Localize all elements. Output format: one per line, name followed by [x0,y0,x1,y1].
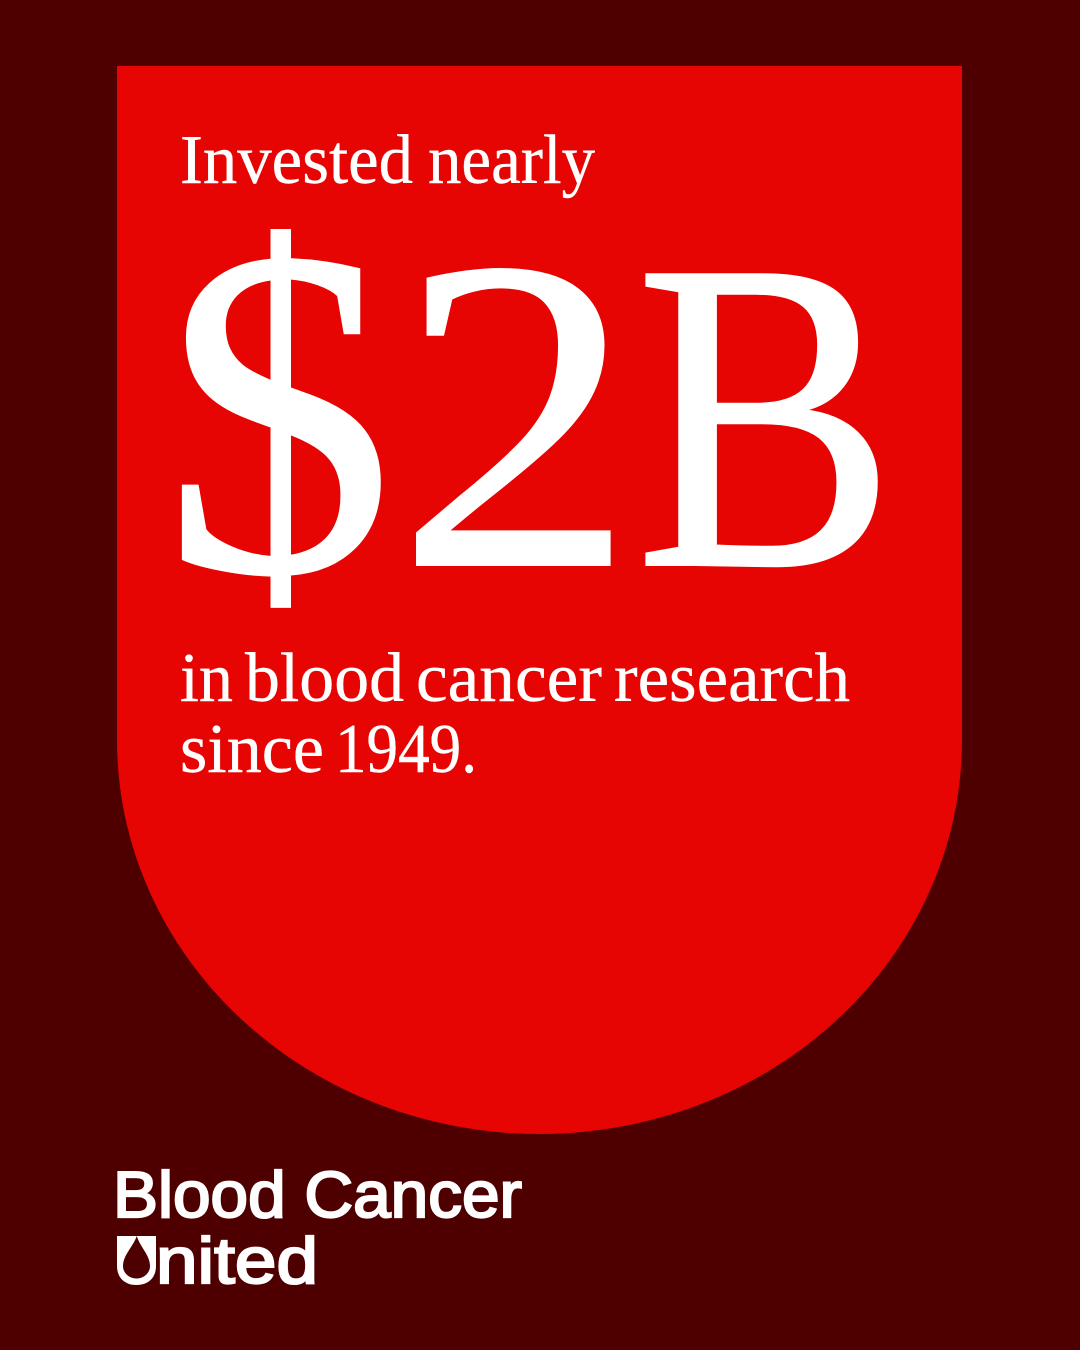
logo: Blood Cancer United: Blood Cancer [113,1158,522,1231]
big number: $2B [163,151,896,673]
panel: red shield [117,66,962,1134]
big number: $2B: 2 [396,167,636,662]
text block: research description: cancer [416,640,602,717]
heading: Invested nearly: Invested [180,122,413,199]
big number: $2B: $ [163,151,394,673]
icon: U with blood drop [117,1236,156,1285]
heading: Invested nearly: nearly [428,122,595,199]
text block: research description: research [614,640,850,717]
text block: research description: 1949. [335,711,477,788]
text block: research description [180,640,850,788]
text block: research description: blood [245,640,404,717]
text block: research description: since [180,711,324,788]
heading: Invested nearly [180,122,595,199]
text block: research description: in [180,640,233,717]
logo: Blood Cancer United [113,1158,522,1297]
logo: Blood Cancer United: nited [156,1224,318,1297]
big number: $2B: B [635,170,896,662]
